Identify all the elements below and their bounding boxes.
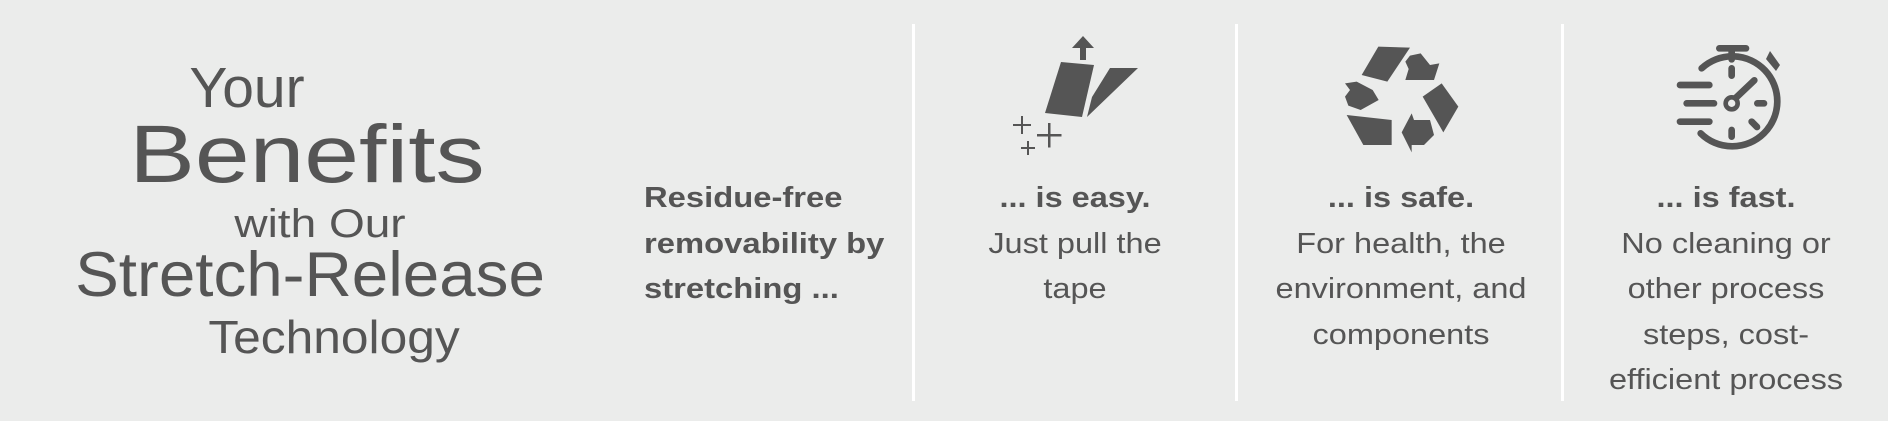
column: easy: Just pull the bbox=[988, 228, 1162, 260]
column: fast: ... is fast. bbox=[1656, 182, 1795, 214]
title bbox=[75, 56, 545, 363]
title: Your bbox=[189, 56, 305, 120]
column: fast: other process bbox=[1628, 273, 1824, 305]
icon: stopwatch bbox=[1676, 45, 1781, 150]
column: safe: environment, and bbox=[1276, 273, 1526, 305]
icon: recycle bbox=[1345, 46, 1458, 152]
title: with Our bbox=[234, 202, 406, 246]
column: fast: efficient process bbox=[1609, 364, 1843, 396]
column: easy: tape bbox=[1043, 273, 1107, 305]
title: Technology bbox=[208, 311, 460, 363]
column: fast: steps, cost- bbox=[1643, 318, 1809, 350]
column: safe: For health, the bbox=[1296, 228, 1506, 260]
intro text: Residue-free bbox=[644, 182, 843, 214]
column: safe bbox=[1276, 182, 1526, 350]
column: fast: No cleaning or bbox=[1621, 228, 1831, 260]
column: easy bbox=[988, 182, 1162, 305]
column: fast bbox=[1609, 182, 1843, 396]
column: safe: ... is safe. bbox=[1328, 182, 1474, 214]
column: safe: components bbox=[1313, 318, 1489, 350]
title: Stretch-Release bbox=[75, 240, 545, 310]
column: easy: ... is easy. bbox=[999, 182, 1151, 214]
intro text bbox=[644, 182, 884, 305]
intro text: removability by bbox=[644, 228, 884, 260]
title: Benefits bbox=[129, 109, 485, 200]
intro text: stretching ... bbox=[644, 273, 839, 305]
